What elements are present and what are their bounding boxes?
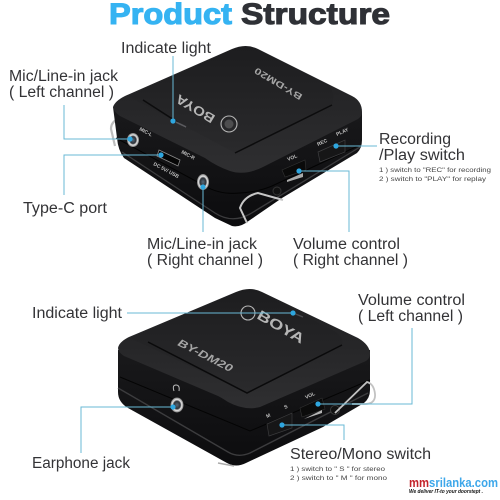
callout: rec/play (333, 131, 491, 183)
top device: MIC-R (180, 149, 196, 162)
groove (148, 342, 342, 393)
port labels: MIC-L (138, 126, 153, 138)
indicator slit (176, 122, 186, 127)
watermark: We deliver IT-to your doorstept . (409, 489, 483, 495)
callout: stereo/mono: 1 ) switch to " S " for stereo (290, 466, 385, 473)
callout: volume left: Volume control (358, 292, 465, 309)
sm switch (267, 413, 292, 436)
callout: rec/play: Recording (379, 131, 451, 148)
top panel (128, 47, 333, 153)
top device: REC (316, 138, 329, 148)
title (109, 0, 390, 31)
right jack (330, 406, 340, 414)
brand: BOYA (172, 91, 218, 126)
body (113, 107, 362, 226)
callout: volume right: Volume control (293, 236, 400, 253)
model: BY-DM20 (176, 337, 235, 375)
callout: volume right: ( Right channel ) (293, 252, 408, 269)
groove (143, 100, 332, 153)
callout: mic R jack: Mic/Line-in jack (147, 236, 257, 253)
callout: mic R jack: ( Right channel ) (147, 252, 263, 269)
mic R jack (197, 174, 209, 190)
brand: BOYA (254, 307, 308, 347)
callout: rec/play: 1 ) switch to "REC" for recording (379, 167, 491, 174)
volume wedge (304, 410, 322, 419)
top panel (130, 290, 342, 393)
callout: type-c: Type-C port (23, 200, 108, 217)
callout: mic L jack: ( Left channel ) (9, 84, 114, 101)
volume wheel (282, 160, 306, 177)
callout: stereo/mono: Stereo/Mono switch (290, 446, 431, 463)
brand badge (241, 306, 255, 320)
callout: mic L jack (9, 68, 133, 142)
seam (120, 377, 370, 431)
callout: rec/play: 2 ) switch to "PLAY" for replay (379, 176, 487, 183)
callout: volume left: ( Left channel ) (358, 308, 463, 325)
rec switch (318, 140, 345, 162)
top device: PLAY (335, 127, 350, 138)
callout: stereo/mono: 2 ) switch to " M " for mono (290, 475, 387, 482)
face (113, 46, 362, 173)
callout: indicate light (top): Indicate light (121, 40, 212, 57)
mic L jack (127, 133, 139, 147)
bottom device: S (283, 404, 289, 411)
callout: type-c (23, 152, 164, 217)
body (118, 350, 370, 466)
model: BY-DM20 (253, 65, 304, 102)
clip: left (111, 119, 118, 146)
face (118, 289, 370, 408)
callout: mic R jack (147, 184, 263, 269)
foot (218, 463, 234, 466)
headphone icon (173, 385, 179, 391)
bottom device: M (265, 413, 272, 420)
callout: indicate light (bottom) (32, 305, 296, 322)
callout: indicate light (top) (121, 40, 212, 124)
callout: rec/play: /Play switch (379, 147, 465, 164)
top device (111, 46, 362, 226)
volume wedge (287, 173, 303, 182)
callout: volume left (315, 292, 465, 407)
clip: right (335, 382, 375, 413)
seam (116, 138, 358, 193)
callout: indicate light (bottom): Indicate light (32, 305, 123, 322)
volume wheel (300, 398, 325, 417)
clip: right (240, 193, 283, 223)
earphone jack (170, 398, 184, 412)
callout: stereo/mono (279, 422, 431, 482)
usb port (157, 150, 180, 166)
lower trim (122, 147, 360, 219)
bottom device (118, 289, 375, 466)
top device: DC 5V/ USB (152, 161, 180, 180)
brand badge (221, 116, 237, 132)
right jack (273, 187, 281, 195)
callout: volume right (293, 168, 408, 269)
bottom device: VOL (304, 391, 316, 401)
indicator slit (293, 313, 303, 317)
callout: earphone (32, 404, 176, 472)
callout: earphone: Earphone jack (32, 455, 130, 472)
lower trim (118, 388, 368, 455)
top device: VOL (287, 153, 298, 163)
callout: mic L jack: Mic/Line-in jack (9, 68, 118, 85)
